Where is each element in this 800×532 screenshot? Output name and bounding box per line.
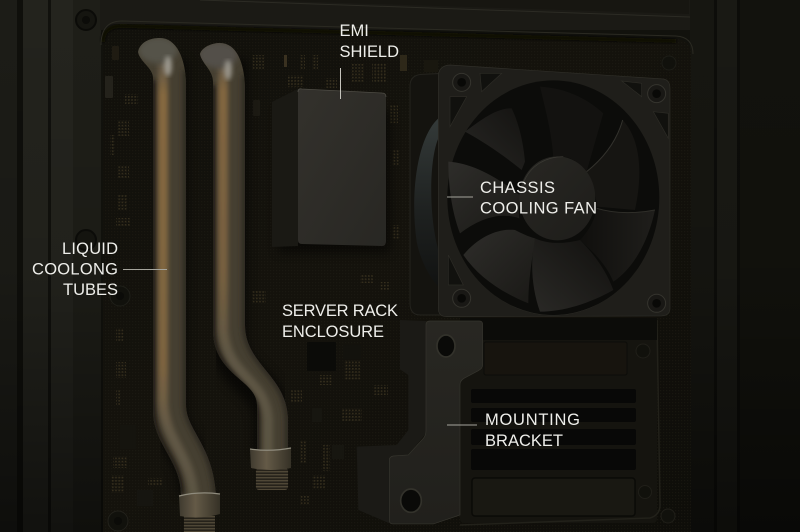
chassis cooling fan (410, 65, 670, 317)
recessed plate (484, 342, 627, 375)
label: mounting bracket: BRACKET (485, 432, 563, 450)
circuit components (105, 46, 438, 506)
board screw holes (76, 10, 676, 531)
tube 1 fitting (179, 493, 220, 532)
label: EMI shield (340, 22, 399, 61)
leader line: chassis fan (447, 196, 473, 198)
liquid cooling tube 2 (200, 43, 288, 450)
fan rear frame (410, 73, 443, 315)
label: mounting bracket: MOUNTING (485, 411, 580, 429)
panel: circuit board (76, 10, 693, 532)
bracket front face (389, 321, 483, 524)
label: EMI shield: SHIELD (340, 43, 399, 61)
EMI shield (272, 89, 390, 252)
fan screw holes (453, 73, 666, 312)
leader line: EMI shield (340, 68, 342, 99)
label: liquid cooling tubes: COOLONG (32, 260, 118, 278)
panel: lower vent area (460, 318, 675, 525)
fan opening (447, 80, 659, 315)
label: liquid cooling tubes: LIQUID (62, 240, 118, 258)
vent screws (636, 344, 675, 523)
lower plate (472, 478, 635, 516)
fan frame corner details (448, 73, 668, 285)
fan blades (448, 87, 655, 312)
liquid cooling tube 1 (138, 38, 216, 495)
label: liquid cooling tubes: TUBES (63, 281, 118, 299)
label: liquid cooling tubes (32, 240, 118, 299)
label: chassis cooling fan: CHASSIS (480, 179, 555, 197)
mounting bracket (357, 320, 483, 524)
fan front frame (438, 65, 670, 317)
label: server rack enclosure: SERVER RACK (282, 302, 398, 320)
fan blue rim (414, 118, 440, 288)
label: EMI shield: EMI (340, 22, 369, 40)
label: server rack enclosure: ENCLOSURE (282, 323, 384, 341)
bracket side face (357, 320, 426, 523)
leader line: mounting bracket (447, 424, 477, 426)
leader line: liquid cooling tubes (123, 268, 167, 270)
bracket holes (401, 335, 455, 512)
label: chassis cooling fan (480, 179, 597, 218)
label: chassis cooling fan: COOLING FAN (480, 200, 597, 218)
fan hub (519, 156, 595, 240)
tube 2 fitting (250, 448, 291, 490)
label: mounting bracket (485, 411, 580, 450)
label: server rack enclosure (282, 302, 398, 341)
vent slots (471, 389, 636, 470)
